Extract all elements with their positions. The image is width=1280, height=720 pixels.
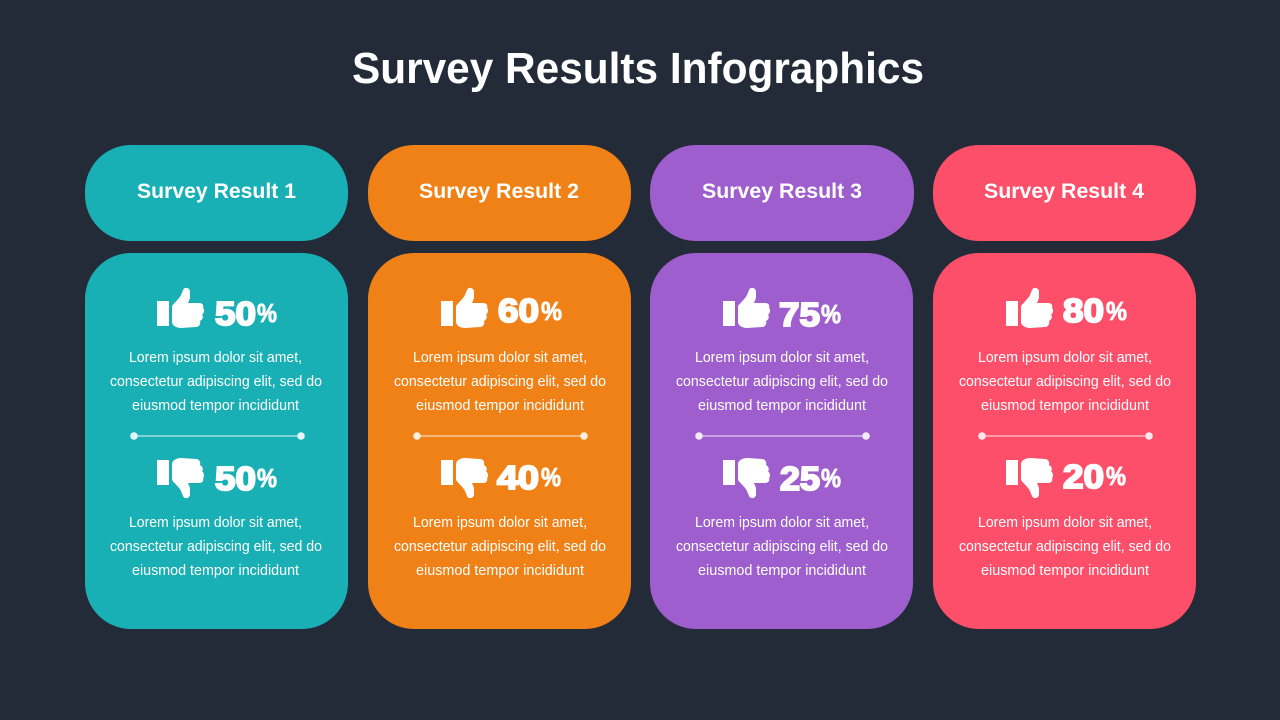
panel 4 — [933, 253, 1196, 629]
text block: negative 2: consectetur adipiscing elit, sed do — [394, 539, 606, 555]
icon: thumbs down 2 — [441, 458, 488, 498]
stat: 25% negative — [780, 460, 841, 497]
header pill 4: Survey Result 4 — [984, 180, 1144, 203]
column: survey result 1 — [85, 145, 348, 629]
stat: 80% positive — [1063, 292, 1127, 329]
stat: 60% positive — [498, 292, 562, 329]
column: survey result 3 — [650, 145, 914, 629]
text block: positive 2 — [394, 350, 606, 414]
text block: negative 2: eiusmod tempor incididunt — [416, 563, 584, 579]
stat: 75% positive — [779, 296, 841, 333]
panel 2 — [368, 253, 631, 629]
icon: thumbs up 1 — [157, 288, 204, 328]
stat: 50% negative: % — [257, 463, 277, 493]
text block: positive 4: consectetur adipiscing elit, sed do — [959, 374, 1171, 390]
stat: 25% negative: 25 — [780, 460, 820, 497]
divider 4 — [978, 432, 1153, 440]
stat: 40% negative: % — [541, 462, 561, 492]
header pill 2: Survey Result 2 — [419, 180, 579, 203]
text block: negative 3: Lorem ipsum dolor sit amet, — [695, 515, 869, 531]
stat: 50% positive — [215, 295, 277, 332]
header pill 1 — [85, 145, 348, 241]
header pill 1: Survey Result 1 — [137, 180, 296, 203]
icon: thumbs down 1 — [157, 458, 204, 498]
header pill 3: Survey Result 3 — [702, 180, 862, 203]
text block: positive 1 — [110, 350, 322, 414]
icon: thumbs down 4 — [1006, 458, 1053, 498]
stat: 20% negative — [1063, 458, 1126, 495]
header pill 2 — [368, 145, 631, 241]
stat: 80% positive: % — [1106, 296, 1127, 326]
text block: positive 4: Lorem ipsum dolor sit amet, — [978, 350, 1152, 366]
text block: positive 4: eiusmod tempor incididunt — [981, 398, 1149, 414]
stat: 50% positive: % — [257, 298, 277, 328]
header pill 3 — [650, 145, 914, 241]
text block: positive 1: consectetur adipiscing elit, sed do — [110, 374, 322, 390]
text block: negative 2: Lorem ipsum dolor sit amet, — [413, 515, 587, 531]
text block: negative 1: Lorem ipsum dolor sit amet, — [129, 515, 302, 531]
icon: thumbs up 2 — [441, 288, 488, 328]
stat: 80% positive: 80 — [1063, 292, 1104, 329]
text block: positive 1: eiusmod tempor incididunt — [132, 398, 299, 414]
text block: negative 4: eiusmod tempor incididunt — [981, 563, 1149, 579]
text block: positive 3: eiusmod tempor incididunt — [698, 398, 866, 414]
divider 3 — [695, 432, 870, 440]
divider 1 — [130, 432, 305, 440]
stat: 75% positive: % — [821, 299, 841, 329]
text block: positive 3: Lorem ipsum dolor sit amet, — [695, 350, 869, 366]
text block: negative 4 — [959, 515, 1171, 579]
stat: 20% negative: % — [1106, 461, 1126, 491]
stat: 50% negative: 50 — [215, 460, 256, 497]
text block: negative 1: eiusmod tempor incididunt — [132, 563, 299, 579]
column: survey result 4 — [933, 145, 1196, 629]
column: survey result 2 — [368, 145, 631, 629]
stat: 40% negative — [497, 459, 561, 496]
text block: negative 3: consectetur adipiscing elit, sed do — [676, 539, 888, 555]
text block: negative 1 — [110, 515, 322, 579]
stat: 50% positive: 50 — [215, 295, 256, 332]
text block: negative 4: consectetur adipiscing elit, sed do — [959, 539, 1171, 555]
stat: 20% negative: 20 — [1063, 458, 1104, 495]
divider 2 — [413, 432, 588, 440]
icon: thumbs up 3 — [723, 288, 770, 328]
icon: thumbs up 4 — [1006, 288, 1053, 328]
icon: thumbs down 3 — [723, 458, 770, 498]
text block: positive 2: Lorem ipsum dolor sit amet, — [413, 350, 587, 366]
text block: negative 4: Lorem ipsum dolor sit amet, — [978, 515, 1152, 531]
text block: negative 3 — [676, 515, 888, 579]
stat: 25% negative: % — [821, 463, 841, 493]
stat: 40% negative: 40 — [497, 459, 539, 496]
text block: positive 4 — [959, 350, 1171, 414]
panel 3 — [650, 253, 913, 629]
text block: positive 2: eiusmod tempor incididunt — [416, 398, 584, 414]
text block: positive 1: Lorem ipsum dolor sit amet, — [129, 350, 302, 366]
text block: negative 2 — [394, 515, 606, 579]
title: Survey Results Infographics — [352, 44, 924, 93]
text block: positive 3: consectetur adipiscing elit, sed do — [676, 374, 888, 390]
stat: 60% positive: % — [541, 296, 562, 326]
text block: positive 3 — [676, 350, 888, 414]
text block: negative 3: eiusmod tempor incididunt — [698, 563, 866, 579]
text block: negative 1: consectetur adipiscing elit, sed do — [110, 539, 322, 555]
panel 1 — [85, 253, 348, 629]
text block: positive 2: consectetur adipiscing elit, sed do — [394, 374, 606, 390]
stat: 60% positive: 60 — [498, 292, 539, 329]
stat: 50% negative — [215, 460, 277, 497]
header pill 4 — [933, 145, 1196, 241]
stat: 75% positive: 75 — [779, 296, 820, 333]
